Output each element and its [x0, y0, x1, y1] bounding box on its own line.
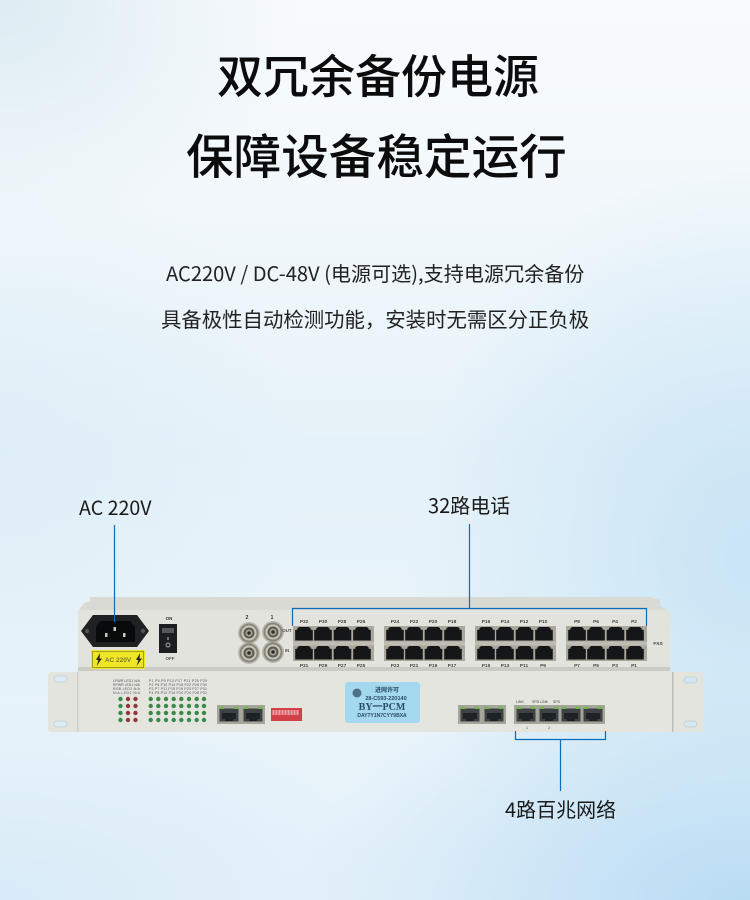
port labels: P28 [338, 619, 347, 625]
LED legend: N/A LED2 N/A [113, 691, 141, 695]
certification sticker: 进网许可 [375, 685, 399, 694]
rear chassis [78, 597, 670, 671]
front chassis [48, 671, 703, 732]
port labels: P5 [593, 663, 599, 669]
port labels: P2 [631, 619, 637, 625]
port labels: P1 [631, 663, 637, 669]
port labels: P20 [429, 619, 438, 625]
status LEDs [118, 697, 206, 722]
LED legend: RGB LED2 N/A [113, 687, 141, 691]
port labels: P10 [539, 619, 548, 625]
port labels: P26 [357, 619, 366, 625]
port labels: P9 [540, 663, 546, 669]
callout line: network ports [516, 731, 606, 791]
port labels: P30 [319, 619, 328, 625]
BNC connectors: 2 [246, 615, 249, 621]
LED legend: P1 P5 P9 P13 P17 P21 P25 P29 [149, 679, 207, 683]
callout line: phone ports [292, 524, 646, 626]
four network ports: 2 [548, 726, 550, 730]
BNC connectors [238, 615, 292, 664]
port labels: P21 [410, 663, 419, 669]
LED legend: P2 P6 P10 P14 P18 P22 P26 P30 [149, 683, 207, 687]
port labels: P17 [448, 663, 457, 669]
certification sticker [345, 682, 420, 723]
port labels: P4 [612, 619, 618, 625]
warning sticker [91, 650, 145, 669]
LED legend: RPWR LED1 N/A [113, 683, 141, 687]
LED legend [113, 679, 207, 695]
LED legend: P3 P7 P11 P15 P19 P23 P27 P31 [149, 687, 207, 691]
port labels [300, 619, 663, 669]
label: AC 220V: AC 220V [79, 492, 151, 521]
port labels: P11 [520, 663, 528, 669]
certification sticker: 28-C593-220140 [365, 696, 407, 702]
LED legend: LPWR LED1 N/A [113, 679, 141, 683]
port labels: FXS [653, 641, 663, 647]
port labels: P18 [448, 619, 457, 625]
callout line: AC socket [114, 525, 116, 622]
BNC connectors: IN [285, 648, 289, 653]
LED legend: P4 P8 P12 P16 P20 P24 P28 P32 [149, 691, 207, 695]
port labels: P13 [501, 663, 510, 669]
four network ports: SPD LINK [532, 700, 549, 704]
port labels: P16 [482, 619, 491, 625]
BNC connectors: 1 [271, 615, 274, 621]
port labels: P25 [357, 663, 366, 669]
port labels: P22 [410, 619, 419, 625]
middle RJ45 ports [458, 705, 506, 724]
certification sticker: BY一PCM [359, 702, 406, 713]
port labels: P19 [429, 663, 438, 669]
left RJ45 ports [217, 705, 265, 724]
port labels: P3 [612, 663, 618, 669]
label: 4 network ports: 4路百兆网络 [505, 794, 616, 823]
four network ports: 1 [526, 726, 528, 730]
port labels: P24 [391, 619, 400, 625]
power switch: ON [166, 616, 172, 621]
power socket [81, 615, 149, 647]
port labels: P15 [482, 663, 491, 669]
DIP switch [271, 708, 302, 721]
description line 1: AC220V / DC-48V (电源可选),支持电源冗余备份 [166, 258, 584, 287]
power switch [159, 616, 177, 661]
power switch: OFF [166, 656, 175, 661]
four network ports: SPD [553, 700, 561, 704]
port labels: P31 [300, 663, 309, 669]
port labels: P29 [319, 663, 328, 669]
port labels: P6 [593, 619, 599, 625]
warning sticker: AC 220V [105, 657, 132, 664]
four network ports: LINK [516, 700, 524, 704]
description line 2: 具备极性自动检测功能，安装时无需区分正负极 [161, 303, 589, 333]
port labels: P12 [520, 619, 529, 625]
port labels: P23 [391, 663, 400, 669]
certification sticker: DAYTY1N7CYY9BXA [357, 713, 407, 719]
title line 1: 双冗余备份电源 [217, 41, 539, 107]
title line 2: 保障设备稳定运行 [186, 119, 567, 188]
FXS port blocks [293, 626, 647, 661]
port labels: P27 [338, 663, 347, 669]
port labels: P7 [574, 663, 580, 669]
port labels: P8 [574, 619, 580, 625]
BNC connectors: OUT [282, 628, 292, 633]
port labels: P14 [501, 619, 510, 625]
four network ports [514, 700, 605, 730]
port labels: P32 [300, 619, 309, 625]
label: 32 phone lines: 32路电话 [428, 490, 510, 519]
